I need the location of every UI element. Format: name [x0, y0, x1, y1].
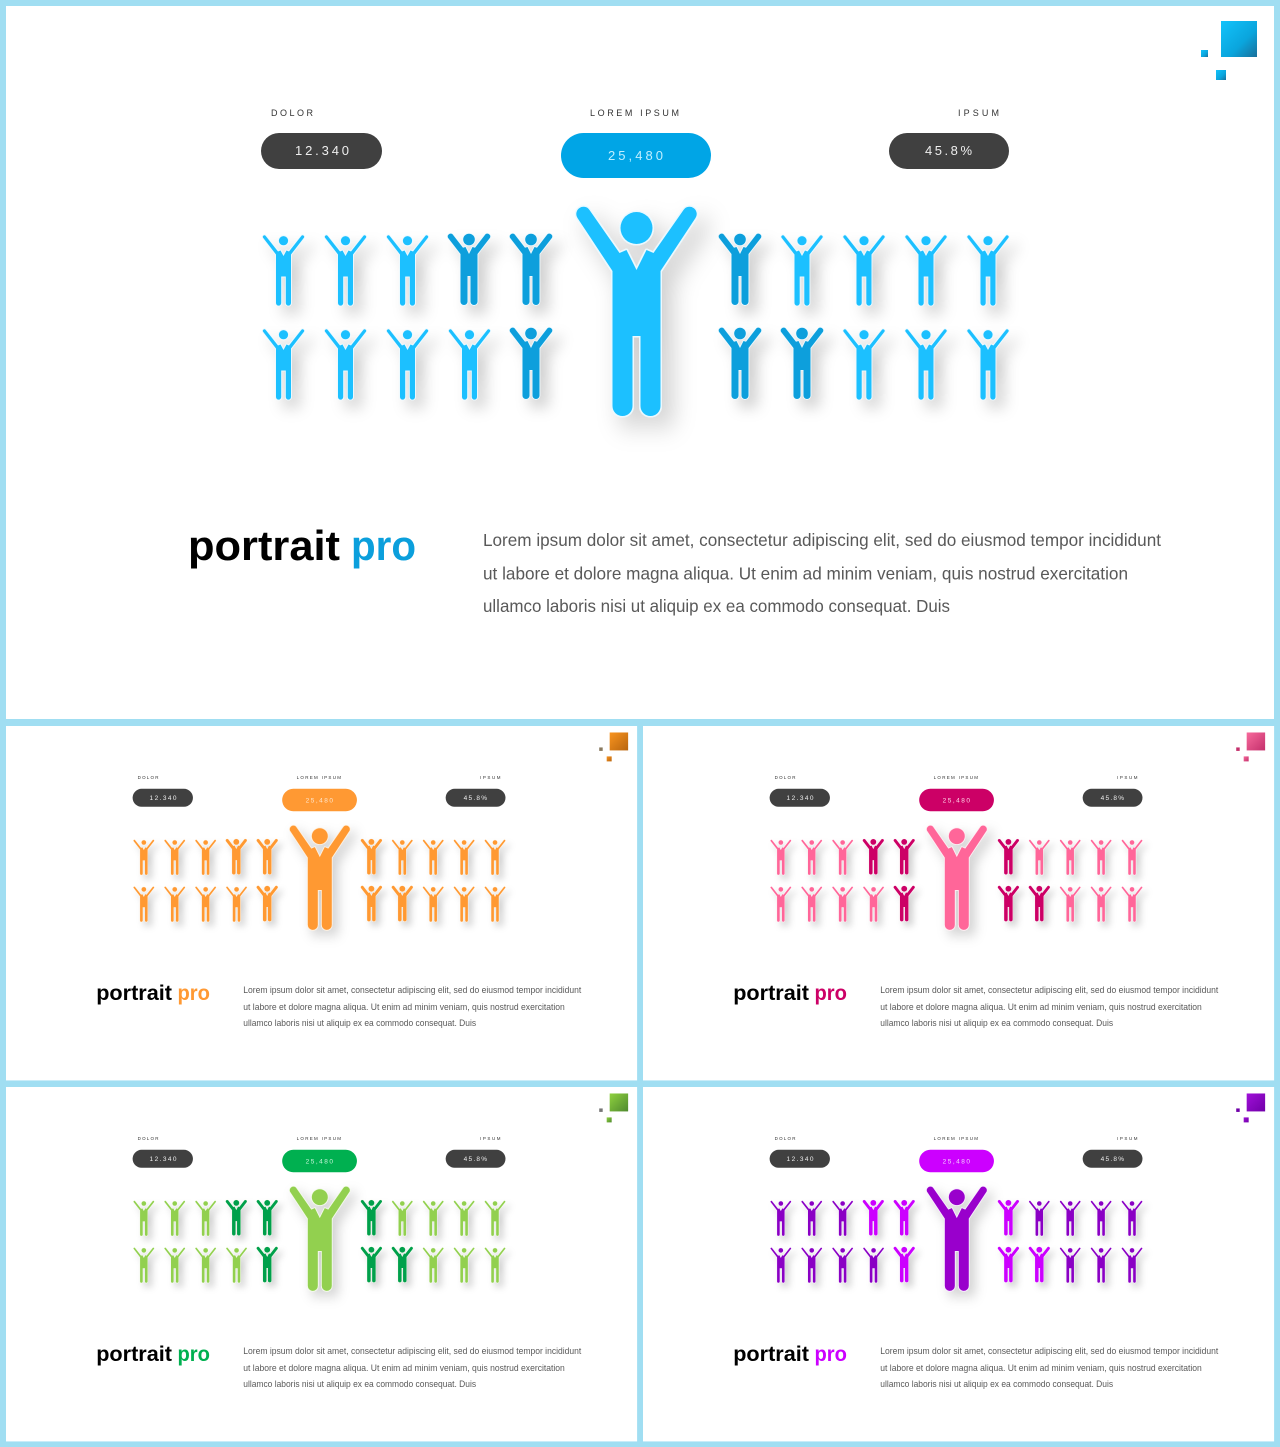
body text: ullamco laboris nisi ut aliquip ex ea commodo consequat. Duis — [243, 1018, 477, 1028]
pill: 12.340: 12.340 — [150, 795, 177, 802]
body text: Lorem ipsum dolor sit amet, consectetur adipiscing elit, sed do eiusmod tempor incididunt — [880, 1346, 1219, 1356]
pill: 25,480 — [282, 1150, 357, 1172]
figures row 1 right — [361, 839, 505, 875]
icon: corner squares — [1236, 732, 1265, 761]
panel: orange slide — [6, 726, 637, 1080]
body text: ut labore et dolore magna aliqua. Ut enim ad minim veniam, quis nostrud exercitation — [243, 1002, 565, 1012]
figures row 1 left — [771, 839, 915, 875]
title: pro — [177, 1343, 210, 1366]
pill: 12.340 — [133, 1150, 193, 1168]
central figure — [927, 1187, 987, 1291]
pill: 12.340 — [261, 133, 382, 169]
label: ipsum: IPSUM — [480, 775, 501, 780]
figures row 1 left — [771, 1200, 915, 1236]
panel: green slide — [6, 1087, 637, 1441]
title: portrait — [96, 982, 172, 1005]
title: portrait — [733, 1343, 809, 1366]
central figure — [927, 826, 987, 930]
body text: ullamco laboris nisi ut aliquip ex ea commodo consequat. Duis — [483, 596, 950, 616]
pill: 45.8% — [1083, 1150, 1142, 1168]
body text: ut labore et dolore magna aliqua. Ut enim ad minim veniam, quis nostrud exercitation — [483, 564, 1128, 584]
body text: ullamco laboris nisi ut aliquip ex ea commodo consequat. Duis — [880, 1379, 1114, 1389]
title — [733, 1343, 847, 1366]
title — [96, 1343, 210, 1366]
pill: 45.8% — [889, 133, 1009, 169]
body text: Lorem ipsum dolor sit amet, consectetur adipiscing elit, sed do eiusmod tempor incididunt — [483, 530, 1161, 550]
icon: corner squares — [599, 1093, 628, 1122]
title: portrait — [188, 522, 340, 569]
label: dolor: DOLOR — [775, 775, 796, 780]
body text — [243, 1346, 582, 1389]
title — [188, 522, 416, 569]
pill: 12.340 — [770, 1150, 830, 1168]
pill: 25,480: 25,480 — [306, 797, 333, 804]
pill: 12.340: 12.340 — [787, 1156, 814, 1163]
figures row 1 right — [998, 1200, 1142, 1236]
pill: 25,480 — [919, 1150, 994, 1172]
pill: 45.8% — [1083, 789, 1142, 807]
pill: 12.340: 12.340 — [787, 795, 814, 802]
label: dolor: DOLOR — [138, 1136, 159, 1141]
pill: 25,480 — [561, 133, 711, 178]
body text — [880, 1346, 1219, 1389]
pill: 45.8%: 45.8% — [1101, 1156, 1124, 1163]
central figure — [576, 207, 697, 416]
panel: blue main slide — [6, 6, 1274, 719]
icon: corner squares — [1236, 1093, 1265, 1122]
pill: 12.340: 12.340 — [150, 1156, 177, 1163]
title: portrait — [733, 982, 809, 1005]
title — [96, 982, 210, 1005]
figures row 2 left — [771, 886, 915, 922]
label: dolor: DOLOR — [271, 108, 314, 118]
title: pro — [177, 982, 210, 1005]
body text: ut labore et dolore magna aliqua. Ut enim ad minim veniam, quis nostrud exercitation — [880, 1002, 1202, 1012]
title: pro — [814, 1343, 847, 1366]
figures row 2 right — [361, 886, 505, 922]
pill: 45.8% — [446, 789, 505, 807]
title — [733, 982, 847, 1005]
pill: 45.8%: 45.8% — [464, 1156, 487, 1163]
body text: Lorem ipsum dolor sit amet, consectetur adipiscing elit, sed do eiusmod tempor incididunt — [243, 985, 582, 995]
figures row 2 right — [719, 328, 1009, 400]
figures row 2 left — [263, 328, 552, 400]
body text: ut labore et dolore magna aliqua. Ut enim ad minim veniam, quis nostrud exercitation — [880, 1363, 1202, 1373]
label: dolor: DOLOR — [138, 775, 159, 780]
figures row 1 right — [719, 234, 1009, 306]
figures row 2 right — [998, 1247, 1142, 1283]
figures row 1 right — [361, 1200, 505, 1236]
figures row 1 left — [134, 1200, 278, 1236]
figures row 2 right — [361, 1247, 505, 1283]
body text: ullamco laboris nisi ut aliquip ex ea commodo consequat. Duis — [243, 1379, 477, 1389]
figures row 2 left — [771, 1247, 915, 1283]
pill: 25,480: 25,480 — [608, 148, 663, 163]
title: portrait — [96, 1343, 172, 1366]
label: ipsum: IPSUM — [958, 108, 999, 118]
title: pro — [814, 982, 847, 1005]
pill: 25,480: 25,480 — [943, 797, 970, 804]
pill: 25,480 — [919, 789, 994, 811]
label: lorem ipsum: LOREM IPSUM — [590, 108, 679, 118]
icon: corner squares — [599, 732, 628, 761]
panel: pink slide — [643, 726, 1274, 1080]
pill: 25,480 — [282, 789, 357, 811]
pill: 45.8%: 45.8% — [464, 795, 487, 802]
body text: Lorem ipsum dolor sit amet, consectetur adipiscing elit, sed do eiusmod tempor incididunt — [243, 1346, 582, 1356]
body text: ullamco laboris nisi ut aliquip ex ea commodo consequat. Duis — [880, 1018, 1114, 1028]
central figure — [290, 1187, 350, 1291]
label: lorem ipsum: LOREM IPSUM — [934, 1136, 978, 1141]
label: ipsum: IPSUM — [1117, 1136, 1138, 1141]
figures row 1 left — [263, 234, 552, 306]
figures row 2 left — [134, 1247, 278, 1283]
body text — [243, 985, 582, 1028]
label: ipsum: IPSUM — [480, 1136, 501, 1141]
pill: 12.340: 12.340 — [295, 143, 349, 158]
body text: Lorem ipsum dolor sit amet, consectetur adipiscing elit, sed do eiusmod tempor incididunt — [880, 985, 1219, 995]
pill: 25,480: 25,480 — [306, 1158, 333, 1165]
figures row 2 right — [998, 886, 1142, 922]
pill: 25,480: 25,480 — [943, 1158, 970, 1165]
label: lorem ipsum: LOREM IPSUM — [297, 775, 341, 780]
title: pro — [351, 522, 416, 569]
body text — [483, 530, 1161, 616]
pill: 12.340 — [770, 789, 830, 807]
central figure — [290, 826, 350, 930]
panel: purple slide — [643, 1087, 1274, 1441]
figures row 1 right — [998, 839, 1142, 875]
label: dolor: DOLOR — [775, 1136, 796, 1141]
pill: 45.8%: 45.8% — [1101, 795, 1124, 802]
pill: 45.8%: 45.8% — [925, 143, 972, 158]
figures row 1 left — [134, 839, 278, 875]
icon: corner squares — [1201, 21, 1257, 80]
pill: 12.340 — [133, 789, 193, 807]
label: lorem ipsum: LOREM IPSUM — [934, 775, 978, 780]
body text — [880, 985, 1219, 1028]
body text: ut labore et dolore magna aliqua. Ut enim ad minim veniam, quis nostrud exercitation — [243, 1363, 565, 1373]
label: lorem ipsum: LOREM IPSUM — [297, 1136, 341, 1141]
figures row 2 left — [134, 886, 278, 922]
pill: 45.8% — [446, 1150, 505, 1168]
label: ipsum: IPSUM — [1117, 775, 1138, 780]
